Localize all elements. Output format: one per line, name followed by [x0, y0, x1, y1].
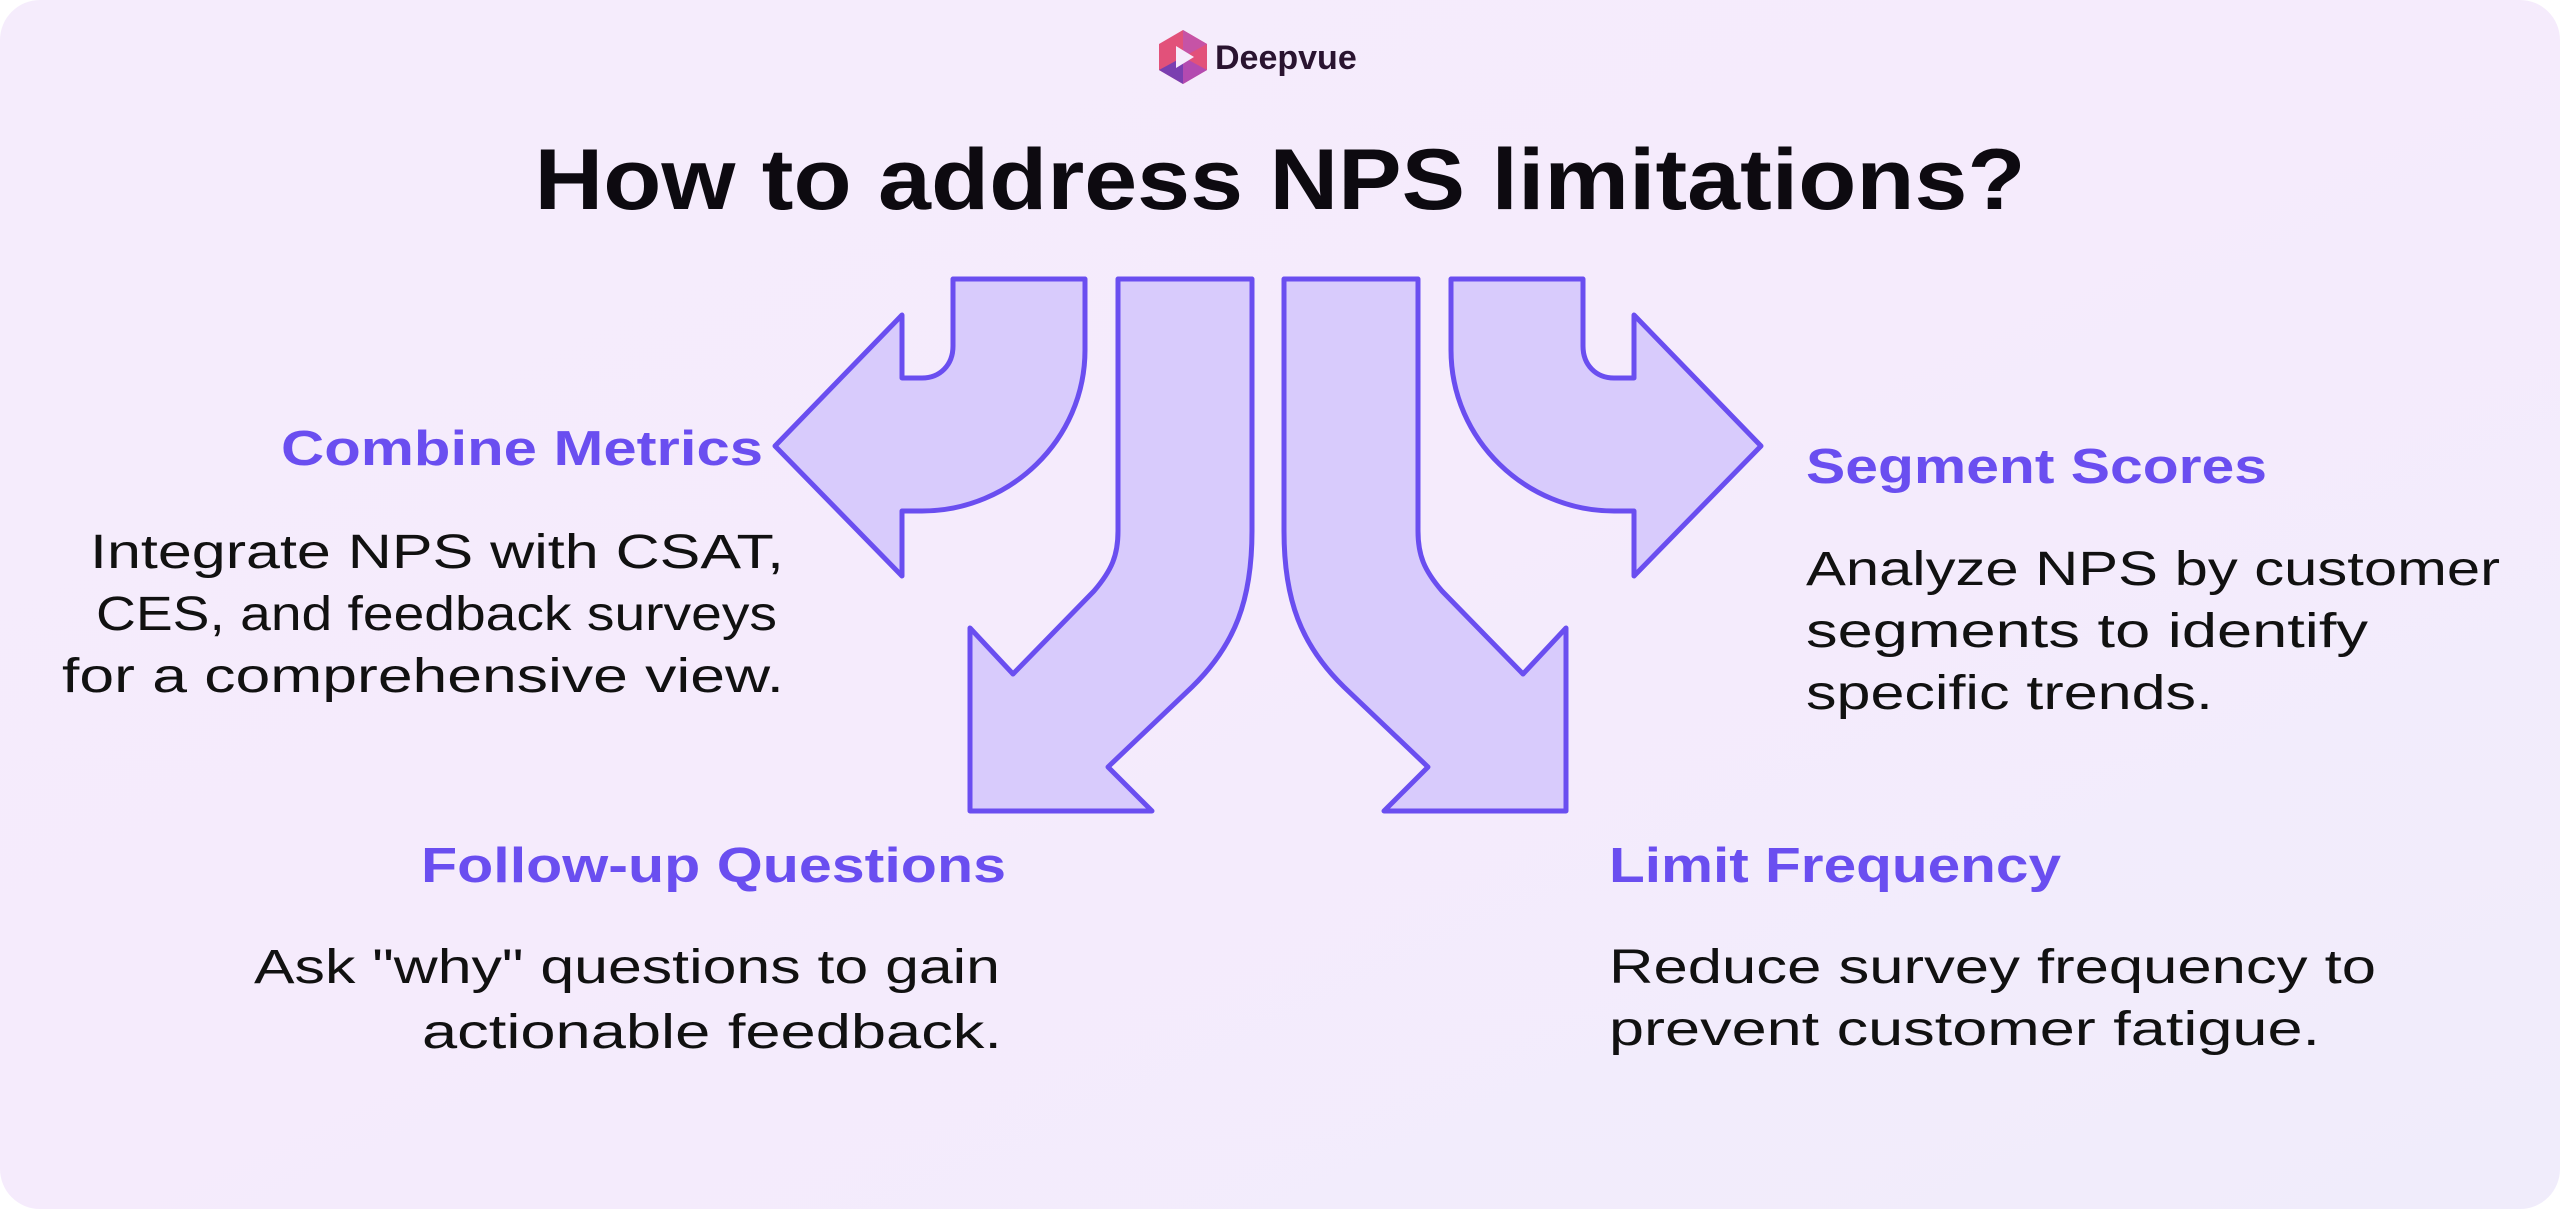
body: combine metrics — [62, 526, 784, 703]
heading: limit frequency: Limit Frequency — [1609, 839, 2061, 893]
body: segment scores: specific trends. — [1806, 667, 2213, 720]
body: limit frequency: Reduce survey frequency to — [1609, 941, 2376, 994]
body: segment scores: segments to identify — [1806, 605, 2368, 658]
body: follow-up questions — [254, 941, 1002, 1059]
arrow: top right — [1451, 279, 1761, 576]
panel: limit frequency — [1609, 839, 2376, 1056]
heading: combine metrics: Combine Metrics — [281, 422, 763, 476]
body: combine metrics: for a comprehensive view. — [62, 650, 784, 703]
title: How to address NPS limitations? — [534, 132, 2026, 228]
body: limit frequency — [1609, 941, 2376, 1056]
arrow: top left — [775, 279, 1085, 576]
body: combine metrics: Integrate NPS with CSAT, — [90, 526, 784, 579]
panel: follow-up questions — [254, 839, 1006, 1059]
body: segment scores: Analyze NPS by customer — [1806, 543, 2500, 596]
heading: segment scores: Segment Scores — [1806, 440, 2267, 494]
body: follow-up questions: Ask "why" questions to gain — [254, 941, 1000, 994]
arrows group — [775, 279, 1761, 811]
arrow: down left — [970, 279, 1252, 811]
heading: follow-up questions: Follow-up Questions — [421, 839, 1006, 893]
body: segment scores — [1806, 543, 2500, 720]
icon: hexagon logo — [1159, 30, 1207, 84]
logo text: Deepvue — [1215, 39, 1357, 77]
body: combine metrics: CES, and feedback surveys — [96, 588, 777, 641]
logo — [1159, 30, 1357, 84]
body: limit frequency: prevent customer fatigue. — [1609, 1003, 2320, 1056]
arrow: down right — [1284, 279, 1566, 811]
panel: combine metrics — [62, 422, 784, 703]
panel: segment scores — [1806, 440, 2500, 720]
body: follow-up questions: actionable feedback. — [422, 1006, 1002, 1059]
